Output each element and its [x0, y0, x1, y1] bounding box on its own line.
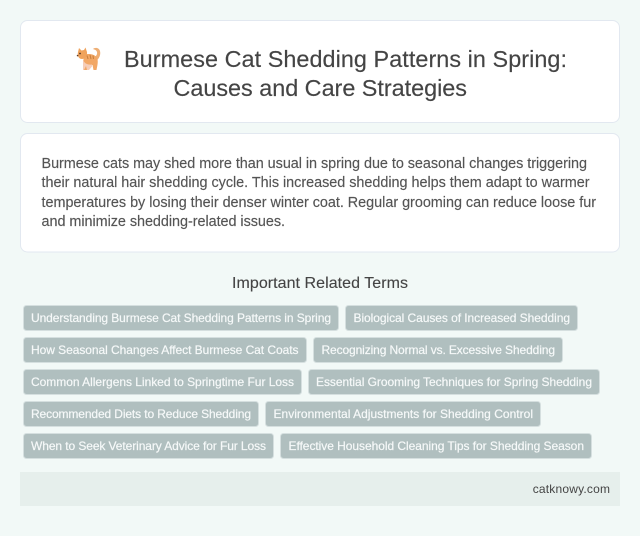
chip group: related terms	[24, 306, 600, 458]
chip: grooming techniques: Essential Grooming Techniques for Spring Shedding	[316, 375, 592, 389]
chip: grooming techniques	[308, 370, 600, 394]
chip: understanding patterns: Understanding Burmese Cat Shedding Patterns in Spring	[31, 311, 331, 325]
footer bar	[20, 472, 620, 506]
chip: environmental adjustments: Environmental Adjustments for Shedding Control	[274, 407, 533, 421]
chip: household cleaning	[280, 434, 592, 458]
panel: title card	[20, 20, 620, 122]
panel: description	[20, 134, 620, 252]
icon: orange cat	[77, 48, 100, 70]
title: Causes and Care Strategies	[174, 75, 467, 101]
chip: normal vs excessive	[314, 338, 562, 362]
text block: description: temperatures by losing their denser winter coat. Regular grooming can reduce loose fur	[42, 195, 596, 211]
chip: recommended diets: Recommended Diets to Reduce Shedding	[31, 407, 251, 421]
text block: description: and minimize shedding-related issues.	[42, 214, 285, 230]
chip: common allergens	[24, 370, 302, 394]
footer source: catknowy.com	[533, 482, 610, 496]
chip: household cleaning: Effective Household Cleaning Tips for Shedding Season	[288, 439, 584, 453]
chip: veterinary advice	[24, 434, 274, 458]
chip: seasonal changes: How Seasonal Changes Affect Burmese Cat Coats	[31, 343, 298, 357]
chip: biological causes: Biological Causes of Increased Shedding	[354, 311, 570, 325]
chip: normal vs excessive: Recognizing Normal vs. Excessive Shedding	[322, 343, 555, 357]
text block: description	[42, 156, 596, 230]
chip: recommended diets	[24, 402, 258, 426]
heading: important related terms: Important Related Terms	[232, 275, 408, 292]
chip: common allergens: Common Allergens Linked to Springtime Fur Loss	[31, 375, 294, 389]
chip: environmental adjustments	[266, 402, 540, 426]
chip: seasonal changes	[24, 338, 306, 362]
chip: veterinary advice: When to Seek Veterinary Advice for Fur Loss	[31, 439, 266, 453]
chip: understanding patterns	[24, 306, 338, 330]
title	[124, 46, 567, 101]
chip: biological causes	[346, 306, 578, 330]
text block: description: their natural hair shedding cycle. This increased shedding helps them adapt to warmer	[42, 175, 590, 191]
title: Burmese Cat Shedding Patterns in Spring:	[124, 46, 567, 72]
text block: description: Burmese cats may shed more than usual in spring due to seasonal changes triggering	[42, 156, 587, 172]
